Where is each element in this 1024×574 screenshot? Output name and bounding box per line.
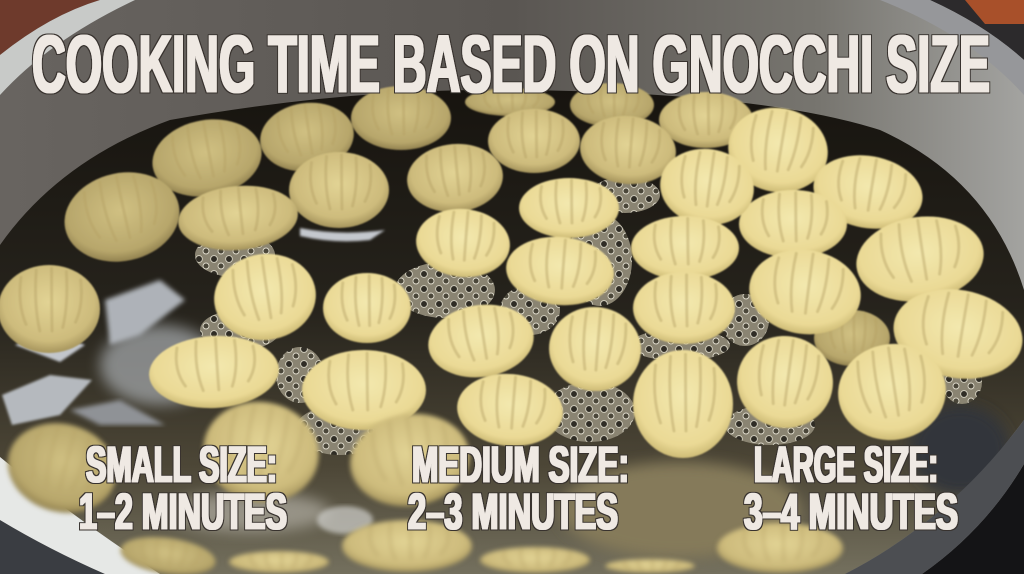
gnocchi: front rows bbox=[147, 247, 952, 458]
label: large size bbox=[744, 436, 958, 540]
pot rim: bottom edge bbox=[0, 420, 1024, 574]
gnocchi: blurred foreground bbox=[0, 393, 843, 574]
label: small size: 1–2 MINUTES bbox=[79, 483, 287, 540]
label: small size bbox=[79, 436, 287, 540]
gnocchi: back row bbox=[0, 83, 890, 366]
label: medium size: 2–3 MINUTES bbox=[408, 483, 618, 540]
label: medium size bbox=[408, 436, 629, 540]
gnocchi: middle rows bbox=[175, 100, 1024, 389]
label: medium size: MEDIUM SIZE: bbox=[412, 436, 629, 493]
foam bubbles around gnocchi bbox=[195, 177, 982, 455]
label: small size: SMALL SIZE: bbox=[86, 436, 277, 493]
